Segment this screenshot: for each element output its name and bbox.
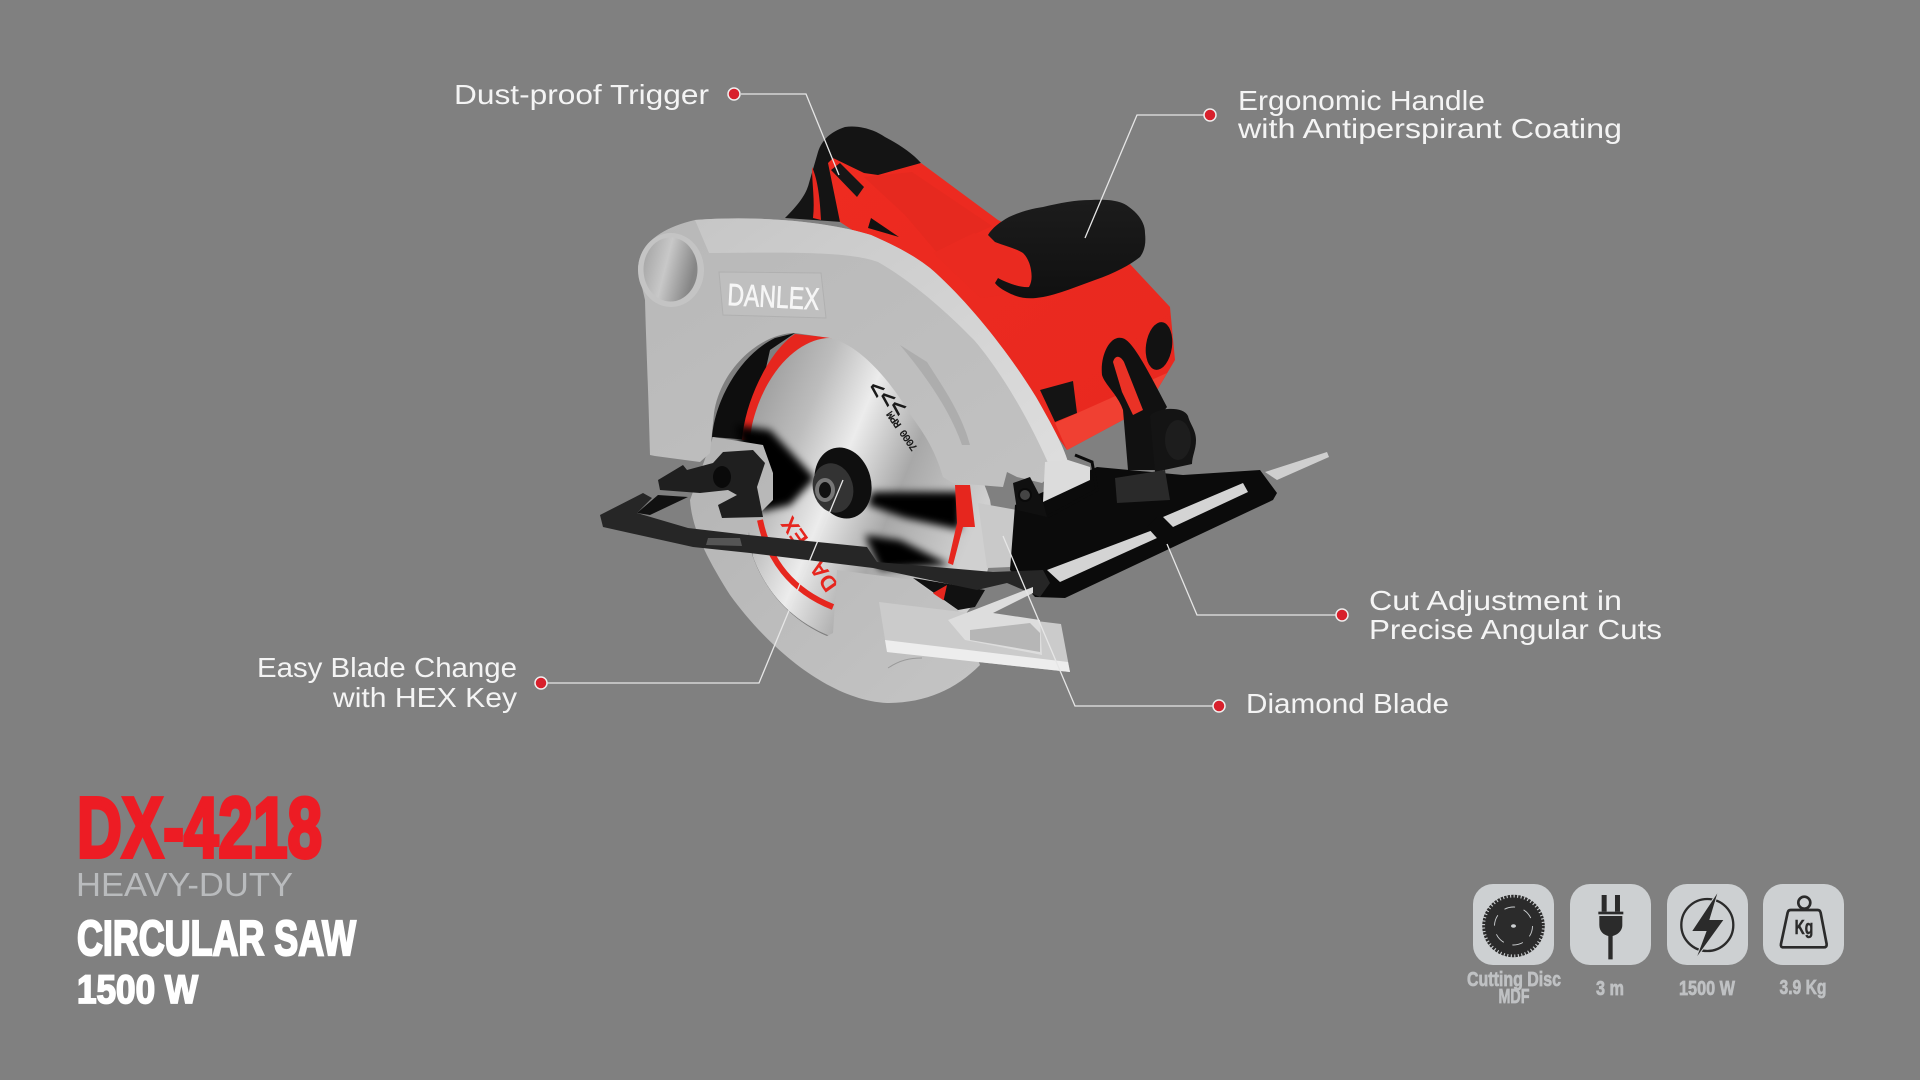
guard rib — [900, 345, 970, 445]
spec: weight — [1763, 884, 1844, 999]
tile — [1570, 884, 1651, 965]
marker dot — [1204, 109, 1216, 121]
red handle joint — [933, 233, 1031, 298]
leader line — [547, 480, 843, 683]
rear handle black grip — [785, 127, 921, 222]
marker dot — [1336, 609, 1348, 621]
dust outlet opening — [644, 238, 698, 302]
icon: lightning — [1681, 893, 1733, 956]
tile — [1667, 884, 1748, 965]
label: Dust-proof Trigger — [454, 79, 709, 110]
hub bolt — [815, 478, 835, 502]
callout: dust-proof trigger — [454, 79, 839, 175]
front base bar — [600, 493, 1050, 597]
housing slit — [868, 218, 899, 237]
guide slot — [970, 623, 1040, 652]
model title block — [76, 781, 357, 1012]
red motor housing — [828, 158, 1175, 450]
leader line — [1003, 536, 1213, 706]
blade underside black — [913, 578, 985, 610]
callout: diamond blade — [1003, 536, 1449, 719]
product image: circular saw — [600, 127, 1329, 703]
label: Ergonomic Handle — [1238, 85, 1485, 116]
icon: kettlebell weight: Kg — [1795, 917, 1813, 939]
model number: DX-4218 — [77, 781, 322, 876]
depth lever arm — [637, 495, 688, 515]
upper blade guard — [638, 218, 1068, 487]
vent slot — [1040, 381, 1077, 422]
bracket opening — [1113, 357, 1143, 415]
guard embossed mark — [888, 658, 922, 668]
marker dot — [535, 677, 547, 689]
side screw — [1143, 320, 1175, 372]
label: Cut Adjustment in — [1369, 585, 1622, 616]
icon: plug — [1598, 895, 1623, 959]
caption: 1500 W — [1679, 978, 1735, 1000]
tile — [1473, 884, 1554, 965]
front guide plate — [879, 602, 1070, 672]
upper knob hub — [1165, 420, 1191, 460]
bevel wing knob — [1150, 409, 1196, 472]
leader line — [741, 94, 839, 175]
lever hole — [713, 466, 731, 488]
pivot roller — [1043, 460, 1090, 502]
saw blade disc — [747, 338, 993, 636]
base plate black — [1010, 467, 1277, 598]
label: with Antiperspirant Coating — [1237, 113, 1622, 144]
label: Precise Angular Cuts — [1369, 614, 1662, 645]
housing darker ridge — [864, 172, 992, 262]
brand logo: DANLEX — [727, 277, 821, 317]
label: with HEX Key — [332, 682, 517, 713]
hub bolt socket — [819, 482, 831, 498]
dust outlet ring — [638, 233, 704, 307]
blade shadow bands — [735, 425, 962, 570]
blade text fragment: EX — [776, 512, 813, 550]
pivot bolt — [1019, 489, 1031, 501]
wattage: 1500 W — [77, 968, 198, 1012]
rail strap — [1147, 517, 1177, 547]
blade text fragment: DA — [804, 556, 843, 596]
tile — [1763, 884, 1844, 965]
callout: ergonomic handle — [1085, 85, 1622, 238]
depth lever — [658, 450, 765, 518]
blade underside red — [933, 585, 947, 603]
lower wing knob — [1115, 470, 1170, 503]
blade hub washer — [807, 441, 879, 525]
guide arm — [948, 587, 1042, 655]
housing lower highlight — [1055, 373, 1167, 450]
ergonomic front knob — [988, 200, 1145, 298]
caption: 3.9 Kg — [1780, 977, 1826, 999]
lower blade guard — [690, 437, 980, 703]
guard light rim — [695, 218, 1068, 472]
product name: CIRCULAR SAW — [77, 912, 357, 966]
marker dot — [728, 88, 740, 100]
blade red graphic right — [948, 485, 975, 565]
spec: power — [1667, 884, 1748, 1000]
shadow behind lower guard — [745, 535, 827, 636]
grip red inlay — [812, 167, 821, 220]
caption: MDF — [1498, 986, 1530, 1008]
chevron mark on blade: <<< — [862, 375, 912, 423]
blade top red crescent — [742, 334, 835, 440]
callout: easy blade change — [257, 480, 843, 713]
bevel scale bracket — [1102, 338, 1167, 470]
opening inner shadow — [712, 333, 795, 440]
plate white edge — [885, 640, 1070, 672]
subtitle: HEAVY-DUTY — [76, 866, 293, 903]
hub nut — [807, 459, 859, 517]
spec: cable length — [1570, 884, 1651, 1000]
blade red arc lower — [760, 520, 833, 607]
leader line — [1085, 115, 1204, 238]
base rail front — [1047, 530, 1157, 582]
caption: Cutting Disc — [1467, 969, 1561, 991]
icon: saw disc — [1484, 896, 1543, 956]
spec: cutting disc — [1467, 884, 1561, 1008]
leader line — [1167, 544, 1336, 615]
rip guide end — [1265, 452, 1329, 480]
callout: cut adjustment — [1167, 544, 1662, 645]
label: Diamond Blade — [1246, 688, 1449, 719]
pivot teeth silver — [978, 503, 1020, 568]
blade speed text: 7000 RPM — [885, 408, 921, 453]
pivot clip — [1047, 455, 1097, 517]
marker dot — [1213, 700, 1225, 712]
caption: 3 m — [1596, 978, 1624, 1000]
base rail rear — [1163, 483, 1248, 527]
logo plate — [719, 272, 826, 318]
bar clip — [706, 538, 742, 546]
trigger — [831, 163, 864, 197]
pivot bracket — [1013, 477, 1047, 517]
label: Easy Blade Change — [257, 652, 517, 683]
